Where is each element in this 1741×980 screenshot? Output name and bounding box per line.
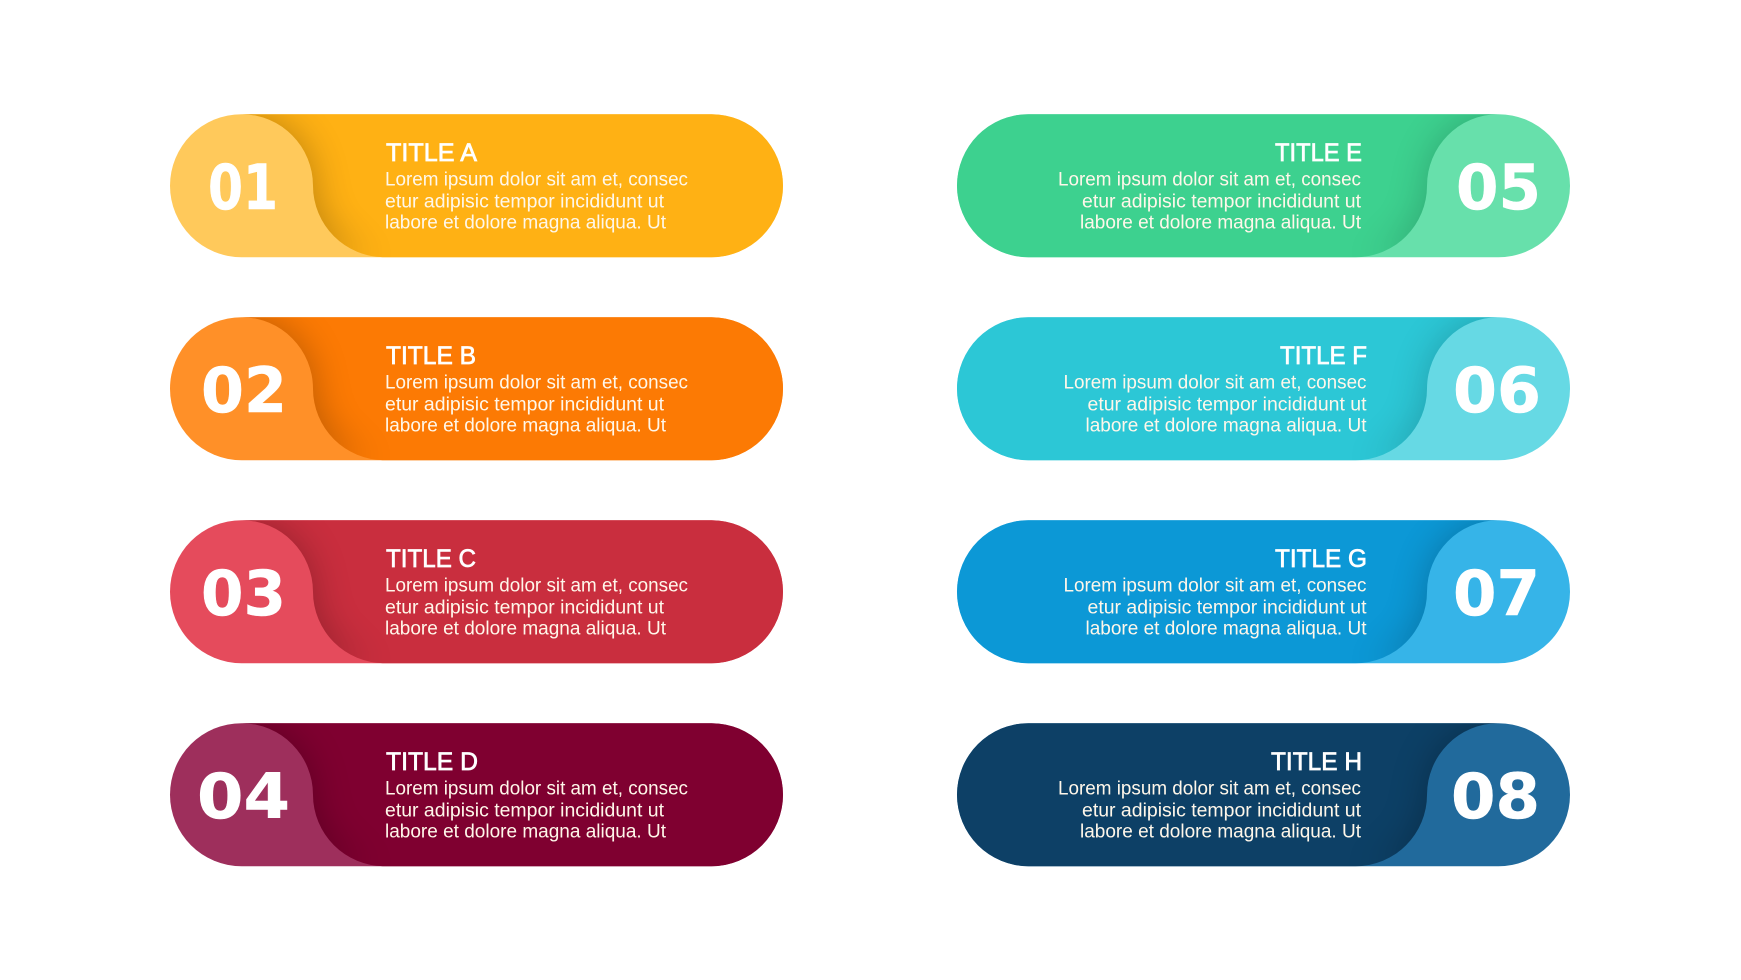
pill shape 07 bbox=[957, 520, 1570, 663]
body text C bbox=[385, 576, 688, 640]
body text D bbox=[385, 778, 688, 842]
body text C: Lorem ipsum dolor sit am et, consec bbox=[385, 576, 688, 596]
body text H bbox=[1058, 778, 1362, 842]
number 04: 04 bbox=[197, 760, 290, 833]
number 08: 08 bbox=[1451, 760, 1540, 833]
body text B: labore et dolore magna aliqua. Ut bbox=[385, 416, 667, 436]
body text F: etur adipisic tempor incididunt ut bbox=[1088, 394, 1367, 416]
body text H: labore et dolore magna aliqua. Ut bbox=[1080, 822, 1362, 842]
body text G: labore et dolore magna aliqua. Ut bbox=[1086, 618, 1367, 640]
body text C: labore et dolore magna aliqua. Ut bbox=[385, 618, 667, 640]
pill shape 05 bbox=[957, 114, 1570, 257]
pill shape 03 bbox=[170, 520, 783, 663]
title G: TITLE G bbox=[1275, 545, 1367, 573]
body text B: etur adipisic tempor incididunt ut bbox=[385, 394, 665, 416]
body text B: Lorem ipsum dolor sit am et, consec bbox=[385, 372, 688, 394]
body text F: Lorem ipsum dolor sit am et, consec bbox=[1064, 372, 1366, 394]
body text E: etur adipisic tempor incididunt ut bbox=[1082, 192, 1362, 212]
panel: item 04 bbox=[170, 723, 783, 866]
panel: item 02 bbox=[170, 317, 783, 460]
number 03: 03 bbox=[201, 557, 286, 630]
title F: TITLE F bbox=[1280, 342, 1367, 370]
panel: item 07 bbox=[957, 520, 1570, 663]
title H: TITLE H bbox=[1271, 748, 1362, 776]
body text A: etur adipisic tempor incididunt ut bbox=[385, 192, 665, 212]
panel: item 03 bbox=[170, 520, 783, 663]
body text D: etur adipisic tempor incididunt ut bbox=[385, 800, 665, 822]
body text G bbox=[1064, 576, 1367, 640]
body text A bbox=[385, 170, 688, 234]
number 01: 01 bbox=[208, 151, 278, 224]
body text E: labore et dolore magna aliqua. Ut bbox=[1080, 212, 1362, 234]
title E: TITLE E bbox=[1275, 139, 1362, 167]
pill shape 04 bbox=[170, 723, 783, 866]
body text H: etur adipisic tempor incididunt ut bbox=[1082, 800, 1362, 822]
body text F: labore et dolore magna aliqua. Ut bbox=[1086, 416, 1367, 436]
body text E bbox=[1058, 170, 1362, 234]
body text A: Lorem ipsum dolor sit am et, consec bbox=[385, 170, 688, 190]
number 05: 05 bbox=[1456, 151, 1541, 224]
body text C: etur adipisic tempor incididunt ut bbox=[385, 598, 665, 618]
number 02: 02 bbox=[201, 354, 287, 427]
pill shape 06 bbox=[957, 317, 1570, 460]
panel: item 06 bbox=[957, 317, 1570, 460]
panel: item 05 bbox=[957, 114, 1570, 257]
title D: TITLE D bbox=[386, 748, 478, 776]
body text D: labore et dolore magna aliqua. Ut bbox=[385, 822, 667, 842]
panel: item 01 bbox=[170, 114, 783, 257]
body text E: Lorem ipsum dolor sit am et, consec bbox=[1058, 170, 1361, 190]
pill shape 01 bbox=[170, 114, 783, 257]
panel: item 08 bbox=[957, 723, 1570, 866]
body text G: etur adipisic tempor incididunt ut bbox=[1088, 598, 1367, 618]
pill shape 08 bbox=[957, 723, 1570, 866]
pill shape 02 bbox=[170, 317, 783, 460]
body text A: labore et dolore magna aliqua. Ut bbox=[385, 212, 667, 234]
body text B bbox=[385, 372, 688, 436]
number 06: 06 bbox=[1453, 354, 1541, 427]
title A: TITLE A bbox=[386, 139, 477, 167]
body text F bbox=[1064, 372, 1367, 436]
body text D: Lorem ipsum dolor sit am et, consec bbox=[385, 778, 688, 800]
title B: TITLE B bbox=[386, 342, 476, 370]
number 07: 07 bbox=[1453, 557, 1540, 630]
body text H: Lorem ipsum dolor sit am et, consec bbox=[1058, 778, 1361, 800]
title C: TITLE C bbox=[386, 545, 476, 573]
body text G: Lorem ipsum dolor sit am et, consec bbox=[1064, 576, 1366, 596]
